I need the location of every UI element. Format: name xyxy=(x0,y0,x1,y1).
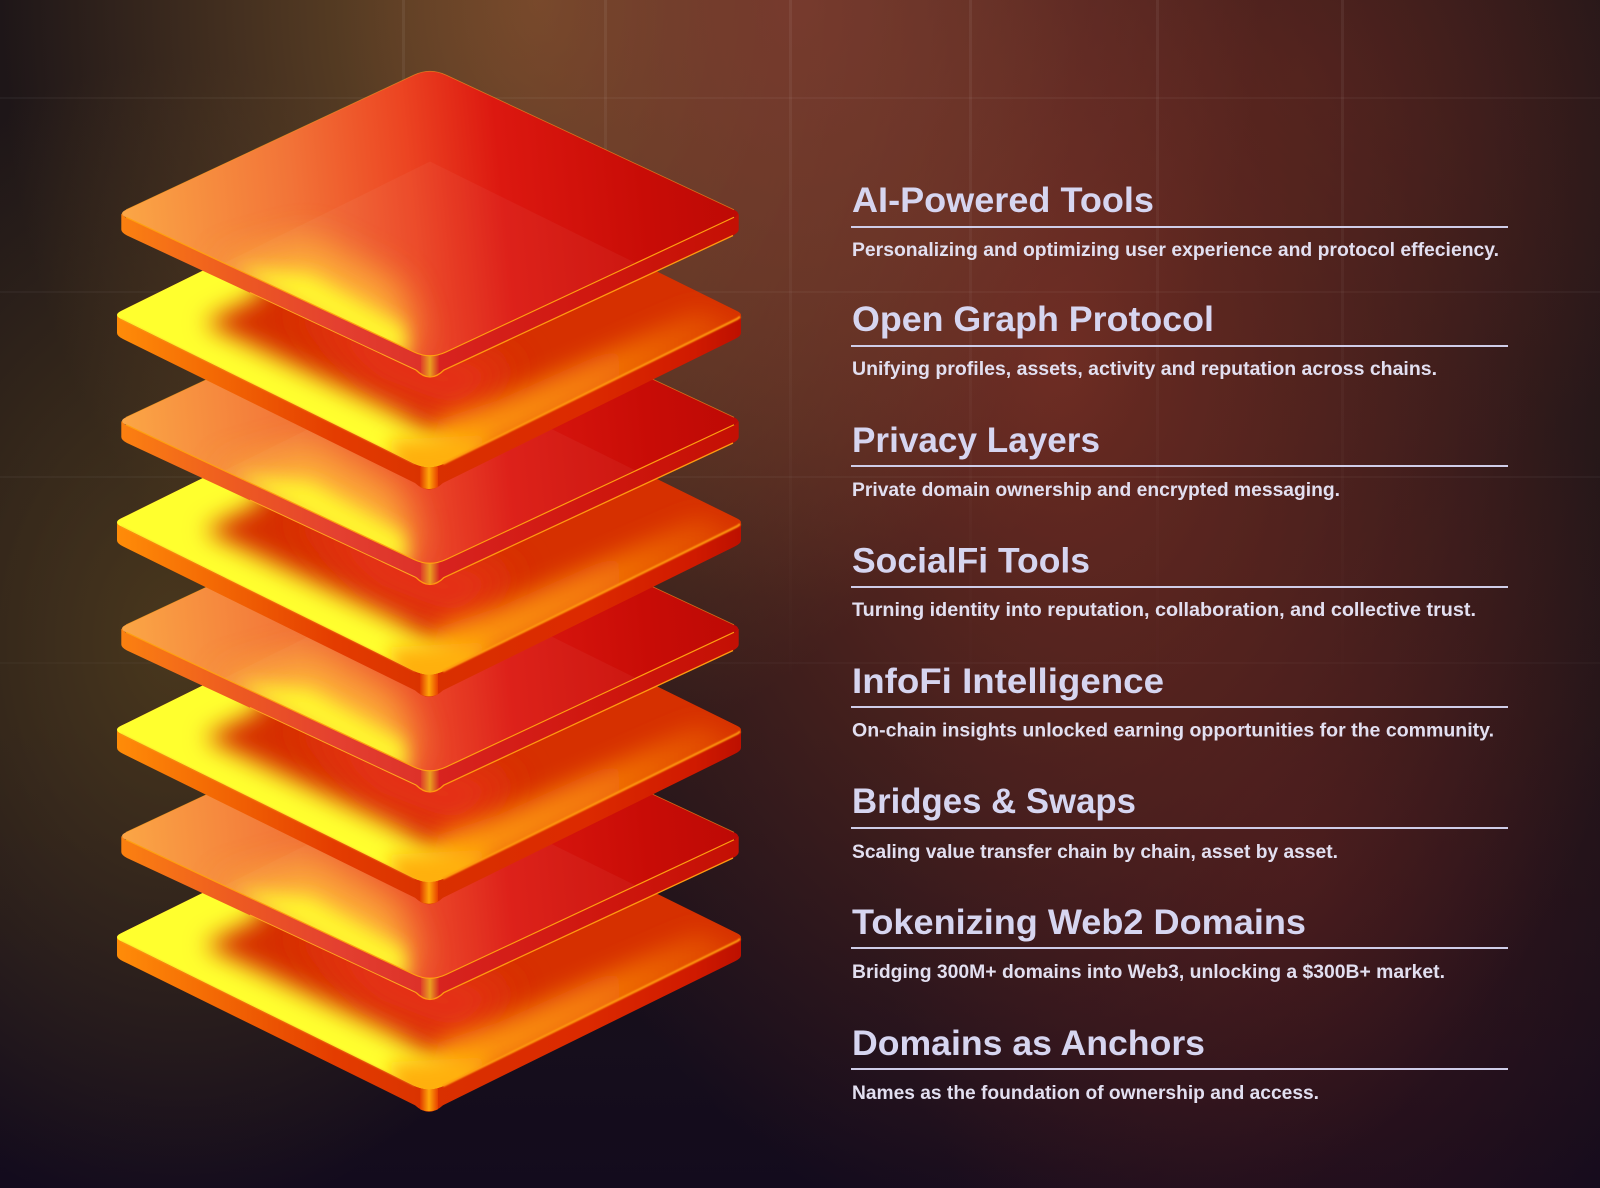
heading: SocialFi Tools xyxy=(852,542,1090,580)
description: Unifying profiles, assets, activity and reputation across chains. xyxy=(852,358,1437,380)
description: On-chain insights unlocked earning opportunities for the community. xyxy=(852,720,1494,742)
item: Bridges & Swaps xyxy=(851,782,1508,863)
heading: AI-Powered Tools xyxy=(852,181,1154,220)
plate 5: translucent red layer xyxy=(118,486,742,888)
plate 6: yellow layer xyxy=(49,578,749,930)
plate 2: yellow layer xyxy=(49,163,749,515)
item: Privacy Layers xyxy=(851,421,1508,501)
plate 8: bottom yellow layer xyxy=(49,785,749,1137)
plate 3: translucent red layer xyxy=(118,279,742,681)
item: Domains as Anchors xyxy=(851,1024,1508,1104)
plate 7: translucent red layer xyxy=(118,694,742,1096)
item: Open Graph Protocol xyxy=(851,300,1508,380)
heading: Privacy Layers xyxy=(852,421,1100,460)
plate 4: yellow layer xyxy=(49,370,749,722)
description: Personalizing and optimizing user experience and protocol effeciency. xyxy=(852,239,1499,261)
heading: InfoFi Intelligence xyxy=(852,662,1164,701)
heading: Open Graph Protocol xyxy=(852,300,1214,339)
description: Private domain ownership and encrypted messaging. xyxy=(852,479,1340,501)
item: AI-Powered Tools xyxy=(851,181,1508,261)
heading: Domains as Anchors xyxy=(852,1024,1205,1063)
description: Bridging 300M+ domains into Web3, unlocking a $300B+ market. xyxy=(852,961,1445,983)
item: Tokenizing Web2 Domains xyxy=(851,903,1508,983)
layer stack illustration xyxy=(49,71,749,1137)
plate 1: top translucent red layer xyxy=(118,71,742,474)
item: SocialFi Tools xyxy=(851,542,1508,621)
text list of layers xyxy=(851,181,1508,1104)
description: Scaling value transfer chain by chain, asset by asset. xyxy=(852,841,1338,863)
heading: Bridges & Swaps xyxy=(852,782,1136,821)
description: Turning identity into reputation, collaboration, and collective trust. xyxy=(852,599,1476,621)
heading: Tokenizing Web2 Domains xyxy=(852,903,1306,942)
description: Names as the foundation of ownership and access. xyxy=(852,1082,1319,1104)
item: InfoFi Intelligence xyxy=(851,662,1508,742)
